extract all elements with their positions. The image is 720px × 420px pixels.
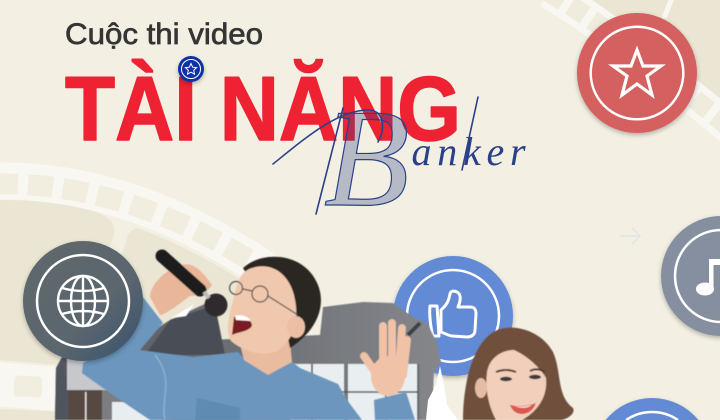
icon badge: star: [577, 13, 697, 133]
arrow: [620, 228, 640, 244]
woman: hair: [463, 328, 574, 420]
woman: eyes: [500, 375, 541, 381]
script word: Banker: [273, 81, 526, 236]
man: mouth: [232, 316, 252, 335]
man: ear: [287, 316, 305, 338]
woman: mouth: [510, 403, 536, 414]
man: shirt: [82, 297, 415, 420]
photo: woman smiling: [463, 328, 574, 420]
film strip: top right: [548, 0, 720, 128]
man: hair: [243, 257, 321, 348]
man: raised hand: [364, 323, 407, 396]
woman: ear: [475, 378, 487, 398]
heading: TÀI NĂNG: TÀI NĂNG: [65, 59, 461, 160]
script word: Banker: B: [324, 81, 410, 236]
woman: face: [486, 350, 546, 420]
photo: man singing: [82, 256, 415, 420]
film strip: left: [0, 181, 268, 420]
photo: torn paper edge: [426, 366, 458, 420]
photo: building backdrop: [55, 302, 441, 420]
badge: blue star: [178, 56, 204, 82]
man: glasses: [230, 282, 298, 315]
icon badge: thumbs up: [393, 256, 513, 376]
heading: Cuộc thi video: Cuộc thi video: [65, 18, 263, 51]
script word: Banker: anker: [412, 129, 526, 174]
man: neck: [240, 340, 292, 375]
icon badge: music: [661, 216, 720, 336]
icon badge: bottom blue: [606, 398, 698, 420]
man: hand holding mic: [150, 264, 212, 315]
icon badge: globe: [23, 241, 143, 361]
man: microphone: [162, 256, 228, 316]
man: face: [228, 266, 296, 354]
woman: brows: [496, 369, 545, 372]
